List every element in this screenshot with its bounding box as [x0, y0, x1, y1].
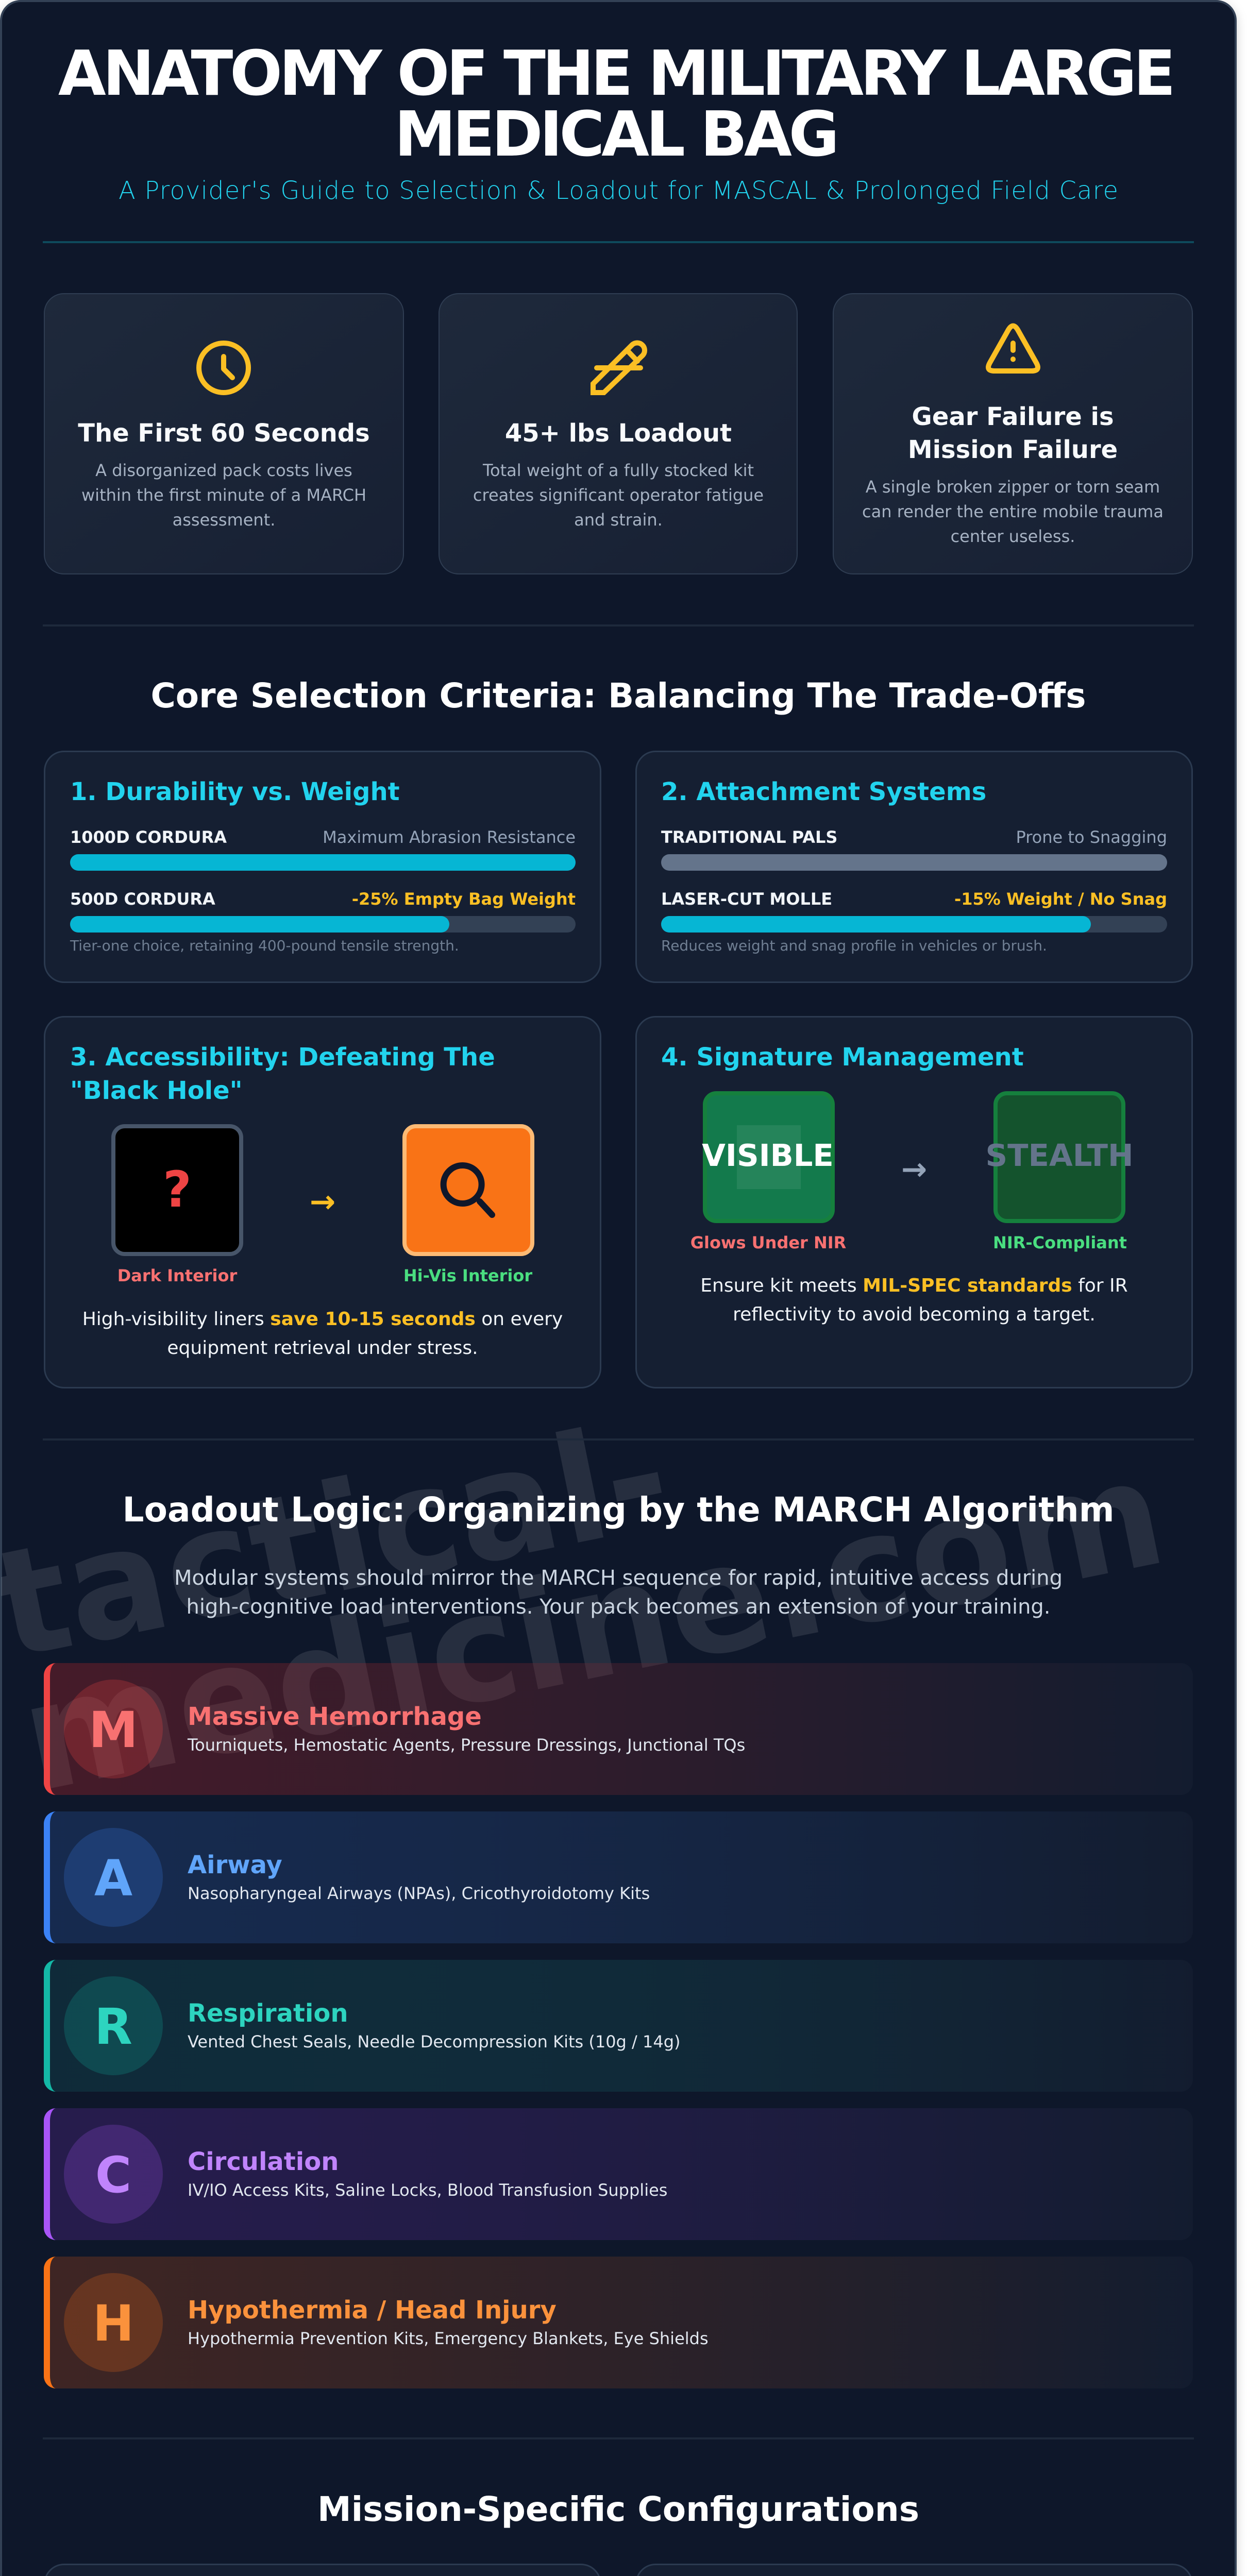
- badge: C: [64, 2125, 163, 2224]
- title: [58, 38, 1172, 171]
- heading: loadout logic: Loadout Logic: Organizing by the MARCH Algorithm: [123, 1490, 1114, 1530]
- icon: visible box: VISIBLE: [702, 1138, 834, 1173]
- text: signature note: [700, 1275, 1128, 1325]
- heading: gear failure: [908, 402, 1118, 464]
- panel: prolonged field care: [636, 2565, 1192, 2576]
- bar: 500D cordura: -25% Empty Bag Weight: [352, 889, 576, 909]
- row: H hypothermia / head injury: [44, 2257, 1193, 2388]
- panel: MASCAL loadout: [44, 2565, 601, 2576]
- heading: durability: 1. Durability vs. Weight: [70, 777, 400, 806]
- heading: accessibility: "Black Hole": [70, 1076, 243, 1105]
- label: dark interior: Dark Interior: [117, 1266, 237, 1285]
- text: attachment note: Reduces weight and snag profile in vehicles or brush.: [661, 937, 1047, 954]
- text: durability note: Tier-one choice, retaining 400-pound tensile strength.: [70, 937, 459, 954]
- heading: hypothermia: Hypothermia / Head Injury: [188, 2296, 557, 2325]
- heading: massive hemorrhage: Massive Hemorrhage: [188, 1702, 482, 1731]
- row: M massive hemorrhage: [44, 1663, 1193, 1795]
- bar: traditional pals: [661, 827, 1167, 871]
- panel: accessibility: [44, 1017, 601, 1388]
- panel: attachment systems: [636, 751, 1192, 982]
- text: accessibility note: High-visibility liners save 10-15 seconds on every: [82, 1309, 563, 1330]
- row: A airway: [44, 1811, 1193, 1943]
- heading: respiration: Respiration: [188, 1999, 348, 2028]
- arrow: dark to hi-vis: →: [310, 1184, 335, 1220]
- background watermark: tactical-: [0, 1388, 683, 1693]
- bar: laser-cut molle: LASER-CUT MOLLE: [661, 889, 832, 909]
- heading: circulation: Circulation: [188, 2147, 339, 2176]
- badge: M: [64, 1680, 163, 1778]
- row: C circulation: [44, 2108, 1193, 2240]
- text: first 60 seconds description: A disorganized pack costs lives: [95, 461, 352, 480]
- text: respiration items: Vented Chest Seals, Needle Decompression Kits (10g / 14g): [188, 2032, 680, 2052]
- text: first 60 seconds description: assessment.: [173, 510, 275, 530]
- text: loadout description: Total weight of a fully stocked kit: [482, 461, 754, 480]
- text: loadout intro: high-cognitive load interventions. Your pack becomes an extension of your training.: [186, 1595, 1051, 1619]
- badge: H: [64, 2273, 163, 2372]
- text: hypothermia items: Hypothermia Prevention Kits, Emergency Blankets, Eye Shields: [188, 2329, 709, 2348]
- bar: laser-cut molle: -15% Weight / No Snag: [954, 889, 1167, 909]
- bar: 1000D cordura: 1000D CORDURA: [70, 827, 227, 847]
- icon: dark interior box: [113, 1126, 241, 1254]
- panel: gear failure: [833, 294, 1192, 574]
- badge: H: H: [93, 2295, 134, 2352]
- heading: mission-specific configurations: Mission-Specific Configurations: [317, 2489, 919, 2529]
- text: first 60 seconds description: within the first minute of a MARCH: [81, 485, 366, 505]
- label: glows under NIR: Glows Under NIR: [690, 1233, 846, 1252]
- icon: stealth box: [985, 1093, 1134, 1221]
- text: loadout description: [473, 461, 764, 530]
- panel: first 60 seconds: [44, 294, 403, 574]
- heading: accessibility: 3. Accessibility: Defeating The: [70, 1043, 495, 1072]
- icon: stealth box: STEALTH: [985, 1138, 1134, 1173]
- row: R respiration: [44, 1960, 1193, 2092]
- text: accessibility note: [82, 1309, 563, 1359]
- bar: 500D cordura: 500D CORDURA: [70, 889, 215, 909]
- heading: accessibility: [70, 1043, 495, 1105]
- text: airway items: Nasopharyngeal Airways (NPAs), Cricothyroidotomy Kits: [188, 1884, 650, 1903]
- text: gear failure description: [862, 477, 1164, 546]
- background watermark: medicine.com: [8, 1426, 1178, 1826]
- text: loadout intro: [174, 1566, 1063, 1619]
- text: gear failure description: can render the entire mobile trauma: [862, 502, 1164, 521]
- heading: the first 60 seconds: The First 60 Seconds: [78, 419, 370, 448]
- heading: gear failure: Gear Failure is: [912, 402, 1114, 431]
- text: signature note: reflectivity to avoid becoming a target.: [733, 1304, 1096, 1325]
- badge: A: A: [94, 1850, 132, 1907]
- heading: airway: Airway: [188, 1851, 282, 1879]
- heading: signature: 4. Signature Management: [661, 1043, 1024, 1072]
- heading: gear failure: Mission Failure: [908, 435, 1118, 464]
- label: hi-vis interior: Hi-Vis Interior: [403, 1266, 532, 1285]
- subtitle: A Provider's Guide to Selection & Loadout for MASCAL & Prolonged Field Care: [119, 176, 1118, 205]
- icon: clock: [199, 343, 248, 393]
- text: loadout description: creates significant operator fatigue: [473, 485, 764, 505]
- text: loadout intro: Modular systems should mirror the MARCH sequence for rapid, intuitive access during: [174, 1566, 1063, 1590]
- title: MEDICAL BAG: [394, 99, 836, 171]
- panel: durability vs weight: [44, 751, 601, 982]
- icon: hi-vis interior box: [405, 1126, 532, 1254]
- text: massive hemorrhage items: Tourniquets, Hemostatic Agents, Pressure Dressings, Junctional TQs: [187, 1735, 745, 1755]
- text: accessibility note: equipment retrieval under stress.: [167, 1337, 478, 1359]
- text: gear failure description: A single broken zipper or torn seam: [866, 477, 1160, 497]
- arrow: visible to stealth: →: [901, 1151, 927, 1188]
- bar: 1000D cordura: [70, 827, 576, 871]
- text: first 60 seconds description: [81, 461, 366, 530]
- bar: traditional pals: TRADITIONAL PALS: [661, 827, 837, 847]
- badge: M: M: [89, 1701, 138, 1759]
- heading: 45+ lbs loadout: 45+ lbs Loadout: [505, 419, 732, 448]
- badge: R: [64, 1976, 163, 2075]
- bar: traditional pals: Prone to Snagging: [1016, 827, 1167, 847]
- heading: attachment: 2. Attachment Systems: [661, 777, 986, 806]
- bar: 500D cordura: [70, 889, 576, 933]
- badge: C: C: [95, 2146, 131, 2204]
- bar: laser-cut molle: [661, 889, 1167, 933]
- badge: R: R: [94, 1998, 132, 2056]
- heading: core selection criteria: Core Selection Criteria: Balancing The Trade-Offs: [150, 676, 1086, 716]
- title: ANATOMY OF THE MILITARY LARGE: [58, 38, 1172, 110]
- icon: warning triangle: [988, 326, 1038, 371]
- icon: pen: [593, 343, 645, 393]
- text: gear failure description: center useless.: [951, 527, 1075, 546]
- text: loadout description: and strain.: [574, 510, 663, 530]
- text: circulation items: IV/IO Access Kits, Saline Locks, Blood Transfusion Supplies: [188, 2180, 667, 2200]
- icon: visible box: [702, 1093, 834, 1221]
- label: NIR-compliant: NIR-Compliant: [993, 1233, 1127, 1252]
- text: signature note: Ensure kit meets MIL-SPEC standards for IR: [700, 1275, 1128, 1296]
- panel: signature management: [636, 1017, 1192, 1388]
- panel: 45+ lbs loadout: [439, 294, 797, 574]
- badge: A: [64, 1828, 163, 1927]
- icon: dark interior box: ?: [163, 1161, 192, 1218]
- bar: 1000D cordura: Maximum Abrasion Resistance: [323, 827, 576, 847]
